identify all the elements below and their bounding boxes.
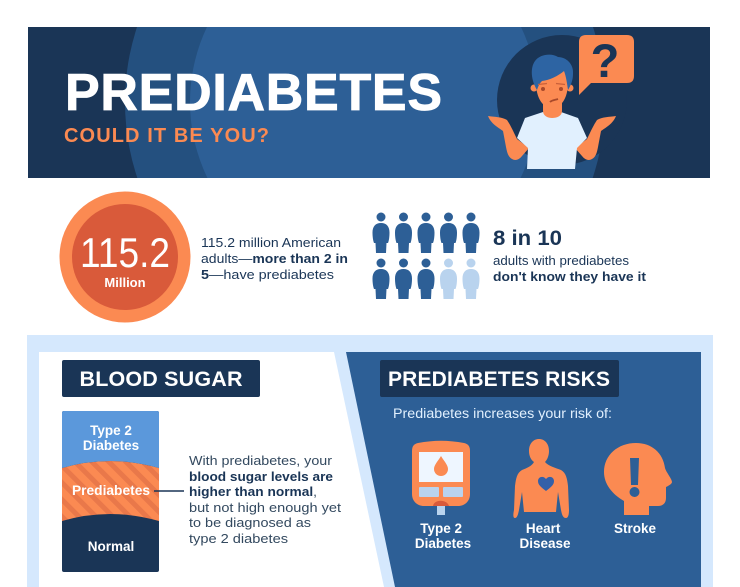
text: blood sugar description: With prediabetes, your [189, 453, 333, 468]
chart: blood sugar levels bar: Diabetes [83, 438, 139, 453]
text: blood sugar description: type 2 diabetes [189, 531, 288, 546]
text: 115.2 million description: adults—more than 2 in [201, 251, 343, 266]
subtitle: COULD IT BE YOU? [64, 125, 269, 147]
text: blood sugar description: but not high enough yet [189, 500, 341, 515]
text: 115.2 million description: 115.2 million American [201, 235, 341, 250]
stat circle: 115.2 million: 115.2 [80, 229, 170, 276]
panel: prediabetes risks [346, 352, 701, 587]
icon: stroke head [604, 443, 672, 515]
stat: 8 in 10: 8 in 10 [493, 227, 562, 250]
chart: blood sugar levels bar: Type 2 [90, 423, 132, 438]
text: 115.2 million description: 5—have prediabetes [201, 267, 324, 282]
label: type 2 diabetes: Type 2 [420, 521, 462, 536]
icon: glucose meter [412, 441, 470, 515]
lower section background [27, 335, 713, 587]
panel: blood sugar [39, 352, 384, 587]
text: blood sugar description: to be diagnosed as [189, 515, 311, 530]
text: blood sugar description: blood sugar levels are [189, 469, 333, 484]
pictogram: 8 in 10 people [372, 212, 480, 299]
heading: prediabetes risks [380, 360, 619, 397]
chart: blood sugar levels bar: Normal [88, 539, 134, 554]
text: unaware description: don't know they have it [493, 269, 647, 284]
stat circle: 115.2 million: Million [104, 275, 146, 290]
icon: worried person with question bubble: ? [591, 34, 619, 87]
text: risk intro: Prediabetes increases your risk of: [393, 406, 612, 421]
connector line [154, 490, 184, 492]
heading: prediabetes risks: PREDIABETES RISKS [388, 368, 610, 391]
banner [28, 27, 710, 178]
icon: worried person with question bubble [488, 34, 634, 169]
text: unaware description: adults with prediabetes [493, 253, 629, 268]
chart: blood sugar levels bar [62, 411, 159, 572]
label: heart disease: Heart [526, 521, 561, 536]
stat circle: 115.2 million [60, 192, 190, 322]
title: PREDIABETES [65, 64, 442, 122]
label: stroke: Stroke [614, 521, 656, 536]
label: type 2 diabetes: Diabetes [415, 536, 471, 551]
heading: blood sugar [62, 360, 260, 397]
label: heart disease: Disease [519, 536, 571, 551]
icon: heart disease body [513, 439, 569, 518]
chart: blood sugar levels bar: Prediabetes [72, 483, 150, 498]
heading: blood sugar: BLOOD SUGAR [80, 367, 243, 391]
text: blood sugar description: higher than normal , [189, 484, 317, 499]
